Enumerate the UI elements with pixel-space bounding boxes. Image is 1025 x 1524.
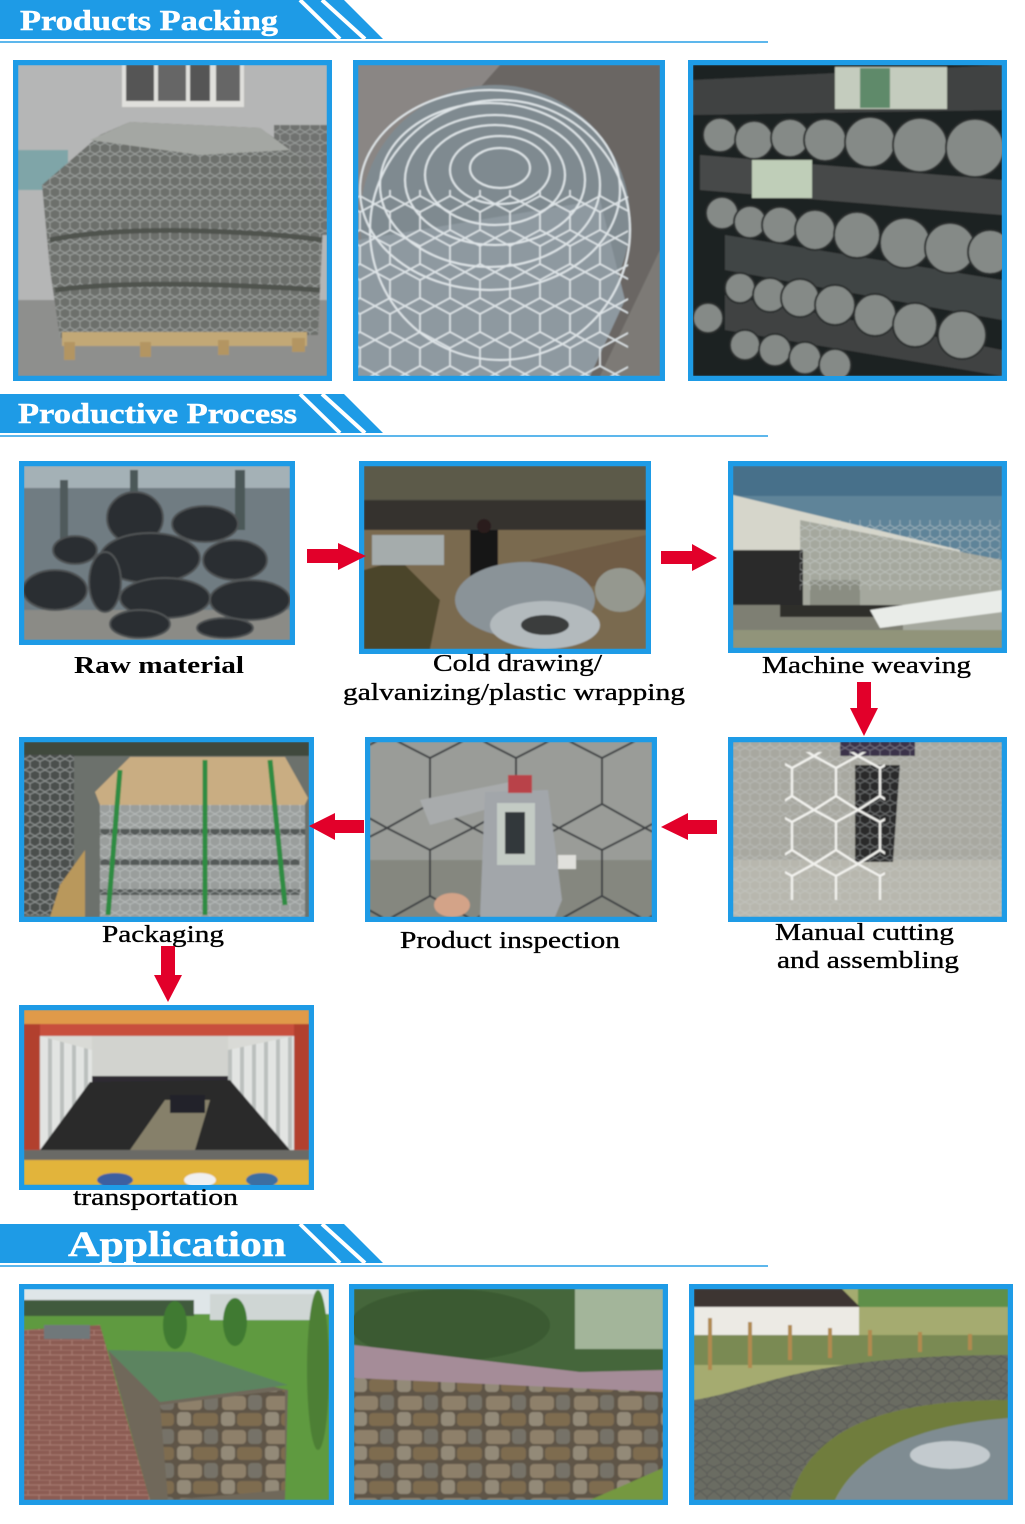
section: productive process	[0, 394, 1007, 1211]
label: transportation: transportation	[73, 1185, 238, 1211]
section: application	[0, 1224, 1013, 1505]
heading: Application	[0, 1224, 768, 1267]
label: Raw material: Raw material	[74, 653, 244, 679]
label: Packaging: Packaging	[102, 922, 224, 948]
label: Product inspection: Product inspection	[400, 928, 620, 954]
arrow: product inspection to packaging	[309, 813, 364, 840]
section: products packing	[0, 0, 1012, 381]
step: transportation	[19, 1005, 314, 1190]
arrow: packaging to transportation	[154, 946, 182, 1002]
arrow: raw material to cold drawing	[307, 543, 366, 570]
photo: stacked gabion mesh bales on pallet	[13, 60, 332, 381]
photo: shelves of wrapped wire rolls	[688, 60, 1012, 381]
arrow: manual cutting to product inspection	[661, 813, 717, 840]
label: Cold drawing / galvanizing / plastic wrapping: Cold drawing/	[433, 651, 602, 677]
arrow: machine weaving to manual cutting	[850, 682, 878, 736]
label: Cold drawing / galvanizing / plastic wrapping: galvanizing/plastic wrapping	[343, 680, 685, 706]
label: Cold drawing / galvanizing / plastic wrapping	[343, 651, 685, 706]
photo: roll of galvanized hexagonal wire	[353, 60, 665, 381]
heading: Productive Process	[0, 394, 768, 437]
step: packaging	[19, 737, 314, 922]
step: cold drawing	[359, 461, 651, 654]
step: machine weaving	[728, 461, 1007, 653]
label: Manual cutting and assembling	[775, 920, 959, 974]
heading: Productive Process: Productive Process	[18, 398, 297, 430]
label: Manual cutting and assembling: Manual cutting	[775, 920, 954, 946]
label: Manual cutting and assembling: and assembling	[777, 948, 959, 974]
label: Machine weaving: Machine weaving	[762, 653, 971, 679]
heading: Products Packing	[0, 0, 768, 43]
arrow: cold drawing to machine weaving	[661, 544, 717, 571]
photo: stone gabion retaining wall with flowers	[349, 1284, 668, 1505]
photo: gabion wall beside brick paving	[19, 1284, 334, 1505]
heading: Products Packing: Products Packing	[20, 5, 279, 37]
heading: Application: Application	[68, 1224, 286, 1264]
step: raw material	[19, 461, 295, 645]
step: manual cutting and assembling	[728, 737, 1007, 922]
photo: curved gabion wall along a stream	[689, 1284, 1013, 1505]
step: product inspection	[365, 737, 657, 922]
